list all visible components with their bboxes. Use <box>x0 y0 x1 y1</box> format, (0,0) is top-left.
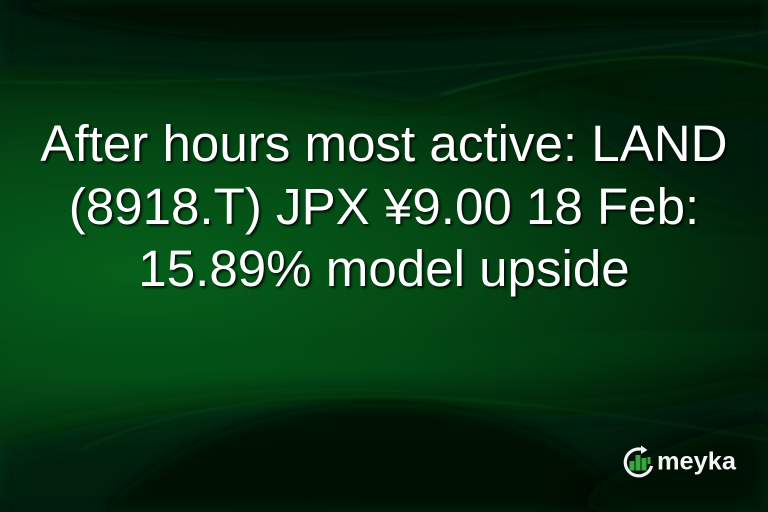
title: 15.89% model upside <box>138 240 630 297</box>
icon: ring with bars <box>625 446 652 476</box>
wordmark: meyka <box>657 448 737 476</box>
title: (8918.T) JPX ¥9.00 18 Feb: <box>69 178 699 234</box>
title: After hours most active: LAND <box>40 115 728 172</box>
title <box>40 115 728 300</box>
logo: meyka <box>624 446 737 478</box>
